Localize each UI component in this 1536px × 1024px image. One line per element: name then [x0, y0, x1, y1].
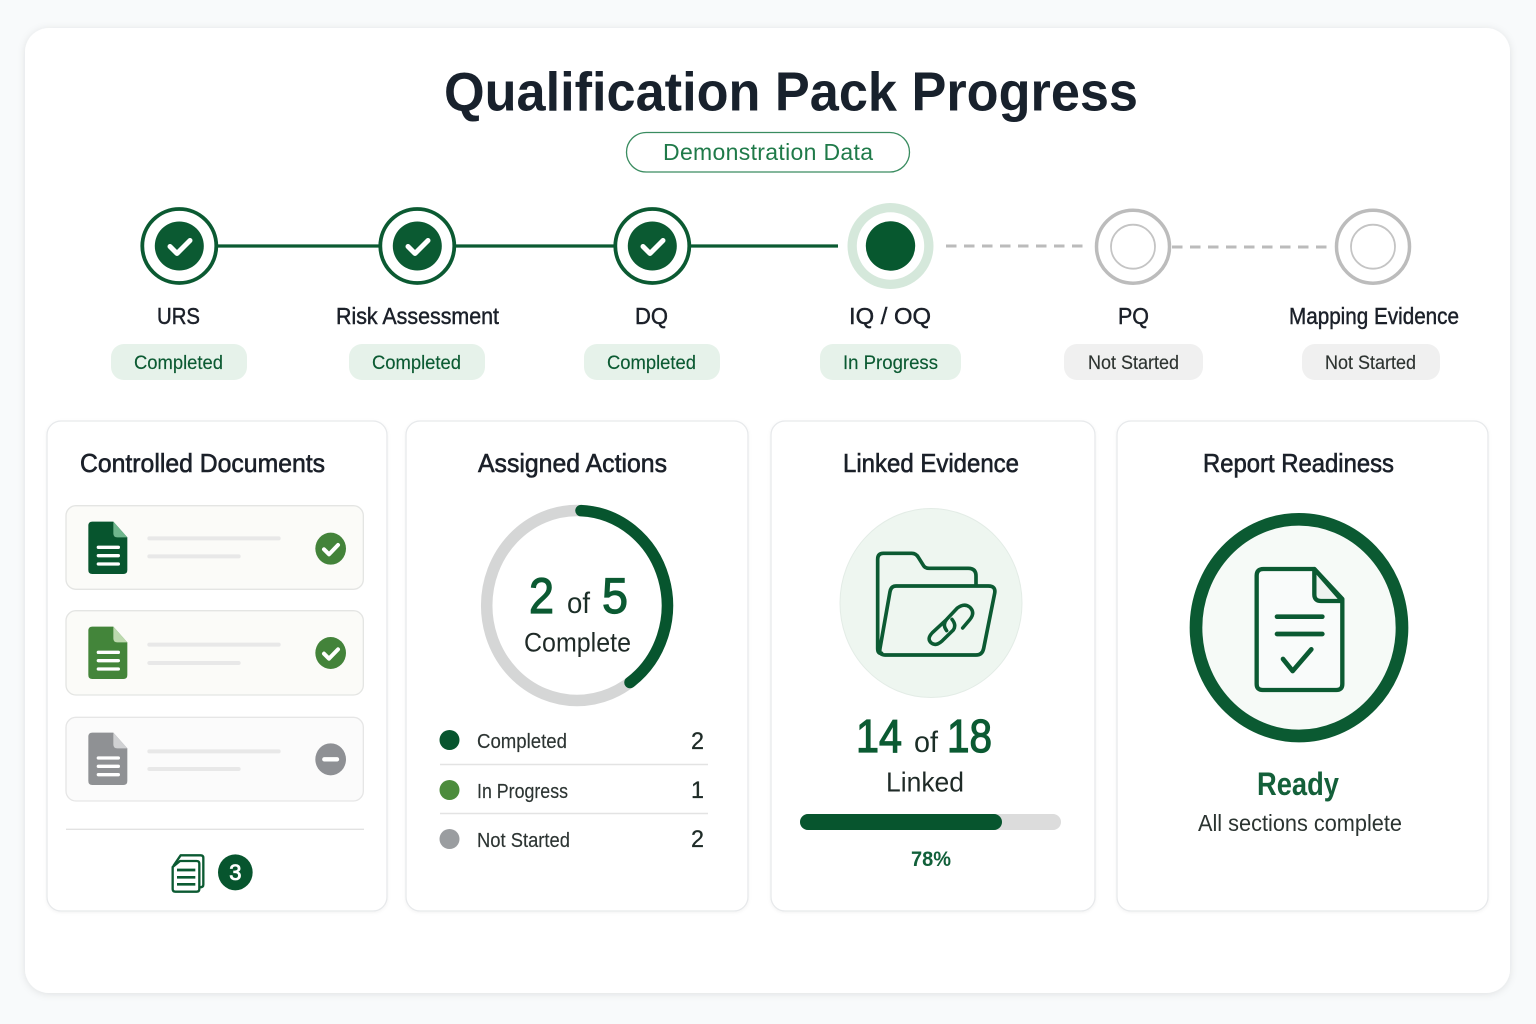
- document row 3: [66, 717, 363, 801]
- step: Mapping Evidence: [1289, 210, 1459, 380]
- step: DQ: DQ: [635, 303, 668, 329]
- connector: pending steps: [946, 246, 1332, 247]
- stat: 14 of 18 linked: Linked: [886, 766, 964, 798]
- step: PQ: PQ: [1118, 303, 1149, 329]
- icon: folder with link: [840, 508, 1022, 698]
- legend row: not started: Not Started: [477, 830, 570, 852]
- step: DQ: [584, 209, 720, 380]
- panel: report readiness: [1117, 421, 1488, 911]
- stat: 14 of 18 linked: of: [914, 726, 939, 759]
- badge: document count: 3: [229, 860, 241, 885]
- legend row: in progress: 1: [691, 777, 704, 804]
- legend row: in progress: In Progress: [477, 781, 568, 803]
- connector: completed steps: [217, 244, 838, 248]
- subtitle pill: demonstration data: Demonstration Data: [663, 139, 873, 165]
- subtitle pill: demonstration data: [626, 132, 910, 172]
- step: DQ: Completed: [607, 352, 696, 374]
- progress bar: 78%: [800, 814, 1061, 871]
- donut chart: 2 of 5 complete: Complete: [524, 628, 631, 658]
- legend row: not started: 2: [691, 826, 704, 853]
- step: URS: [111, 209, 247, 380]
- document row 1: [66, 506, 363, 589]
- step: Mapping Evidence: Not Started: [1325, 352, 1416, 374]
- badge: document count: [218, 854, 253, 890]
- heading: linked evidence: Linked Evidence: [843, 448, 1019, 478]
- status: ready: Ready: [1257, 766, 1339, 802]
- icon: report ready ring: [1196, 519, 1402, 736]
- progress stepper: [111, 203, 1459, 380]
- step: IQ / OQ: IQ / OQ: [849, 303, 931, 329]
- legend row: not started: [440, 826, 704, 853]
- legend row: completed: 2: [691, 728, 704, 755]
- heading: report readiness: Report Readiness: [1203, 448, 1394, 478]
- step: Risk Assessment: [336, 209, 500, 380]
- step: PQ: Not Started: [1088, 352, 1179, 374]
- legend row: in progress: [440, 777, 704, 804]
- step: IQ / OQ: [820, 203, 961, 380]
- stat: 14 of 18 linked: [856, 710, 992, 798]
- legend row: completed: Completed: [477, 731, 567, 753]
- step: Risk Assessment: Risk Assessment: [336, 303, 500, 329]
- panel: assigned actions: [406, 421, 748, 911]
- step: URS: Completed: [134, 352, 223, 374]
- donut chart: 2 of 5 complete: of: [567, 587, 591, 620]
- legend row: completed: [440, 728, 704, 755]
- stat: 14 of 18 linked: 14: [856, 710, 902, 762]
- step: URS: URS: [157, 303, 200, 329]
- panel: linked evidence: [771, 421, 1095, 911]
- stat: 14 of 18 linked: 18: [947, 710, 992, 762]
- icon: document stack: [173, 855, 203, 892]
- step: Mapping Evidence: Mapping Evidence: [1289, 303, 1459, 329]
- heading: assigned actions: Assigned Actions: [478, 448, 667, 478]
- donut chart: 2 of 5 complete: 5: [602, 568, 628, 624]
- donut chart: 2 of 5 complete: [487, 510, 667, 700]
- title: Qualification Pack Progress: [444, 60, 1138, 122]
- donut chart: 2 of 5 complete: 2: [529, 568, 554, 624]
- caption: all sections complete: All sections complete: [1198, 810, 1402, 836]
- legend: action statuses: [440, 728, 708, 853]
- document row 2: [66, 611, 363, 695]
- heading: controlled documents: Controlled Documents: [80, 448, 325, 478]
- panel: controlled documents: [47, 421, 387, 911]
- step: PQ: [1064, 210, 1203, 380]
- step: IQ / OQ: In Progress: [843, 352, 938, 374]
- progress bar: 78%: 78%: [911, 848, 951, 871]
- step: Risk Assessment: Completed: [372, 352, 461, 374]
